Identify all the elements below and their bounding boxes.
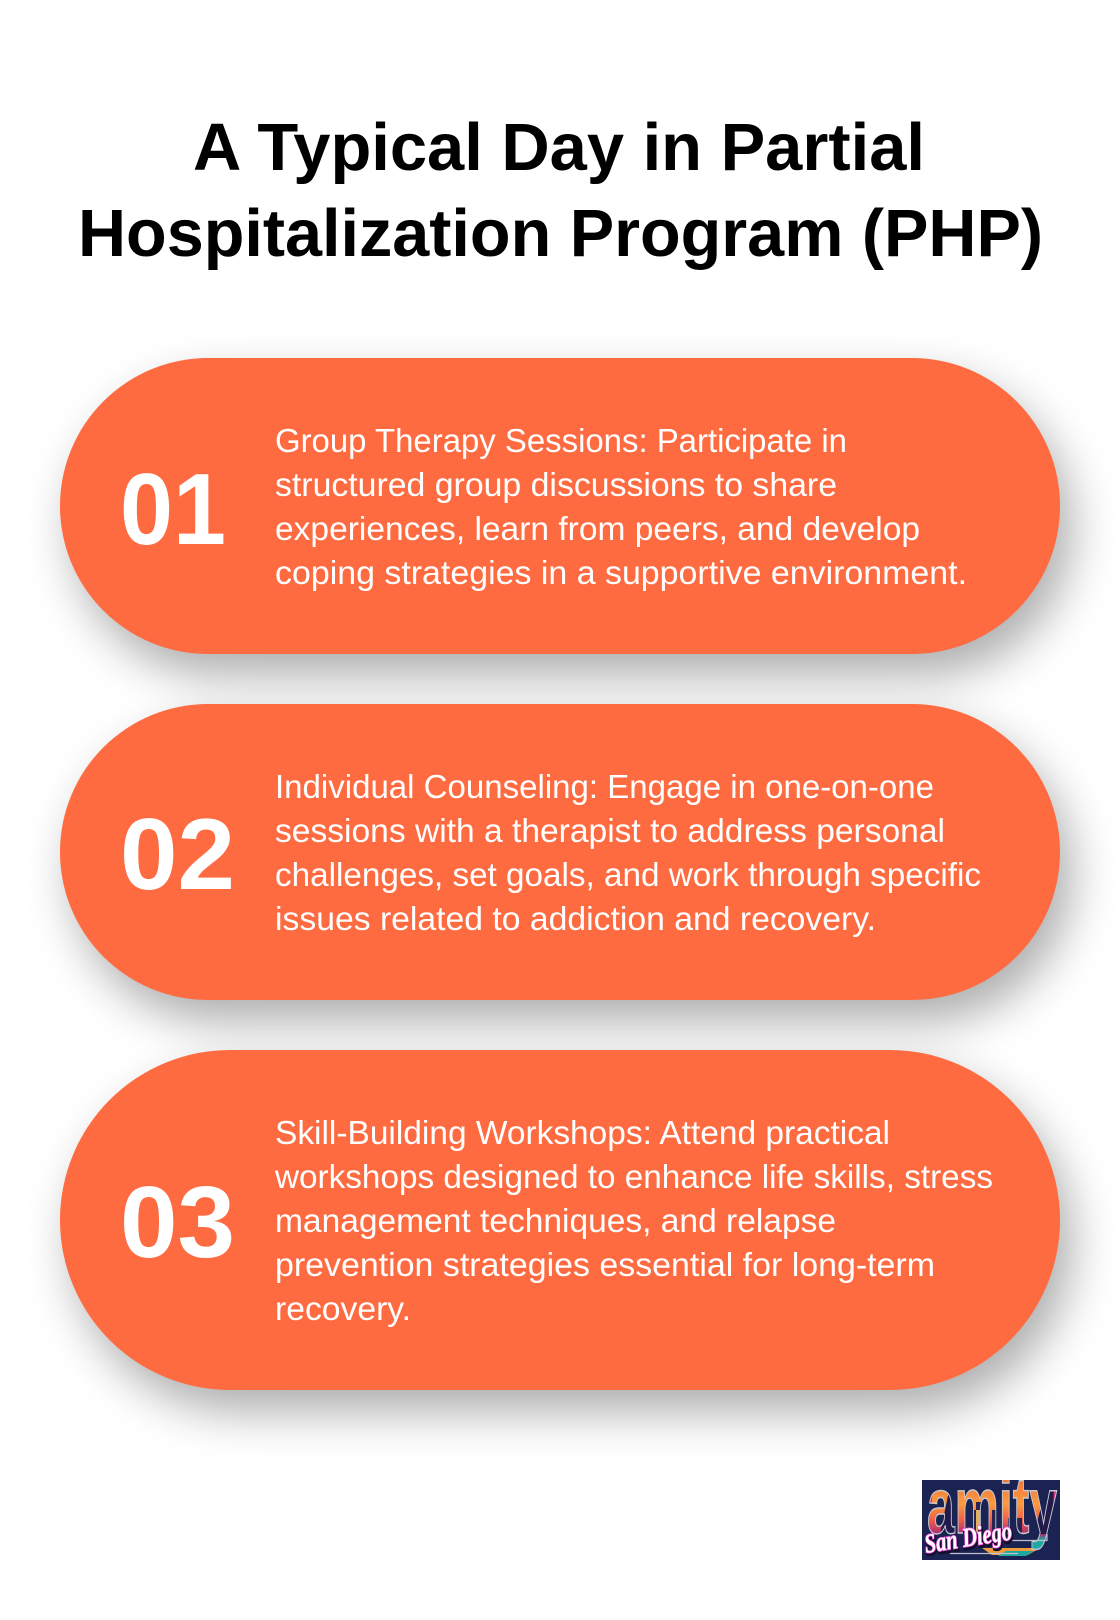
title: Hospitalization Program (PHP) <box>78 196 1043 271</box>
text: skill-building workshops: management techniques, and relapse <box>275 1202 836 1239</box>
number 03: 03 <box>120 1167 235 1279</box>
text: individual counseling: challenges, set goals, and work through specific <box>275 856 981 893</box>
text: individual counseling <box>275 768 981 937</box>
title: A Typical Day in Partial <box>193 110 925 185</box>
text: group therapy sessions: Group Therapy Sessions: Participate in <box>275 422 847 459</box>
number 02: 02 <box>120 799 235 911</box>
text: individual counseling: sessions with a therapist to address personal <box>275 812 945 849</box>
text: group therapy sessions <box>275 422 967 591</box>
text: group therapy sessions: experiences, learn from peers, and develop <box>275 510 920 547</box>
number 01: 01 <box>120 454 226 566</box>
text: individual counseling: Individual Counseling: Engage in one-on-one <box>275 768 934 805</box>
logo: Amity San Diego: San Diego <box>923 1518 1015 1560</box>
text: skill-building workshops: recovery. <box>275 1290 411 1327</box>
logo: Amity San Diego: San Diego <box>922 1516 1014 1559</box>
text: skill-building workshops <box>274 1114 993 1327</box>
text: skill-building workshops: prevention strategies essential for long-term <box>275 1246 935 1283</box>
panel: step 1 group therapy <box>60 358 1060 654</box>
panel: step 2 individual counseling <box>60 704 1060 1000</box>
text: individual counseling: issues related to addiction and recovery. <box>275 900 876 937</box>
panel: step 3 skill-building workshops <box>60 1050 1060 1390</box>
text: skill-building workshops: Skill-Building Workshops: Attend practical <box>275 1114 890 1151</box>
text: skill-building workshops: workshops designed to enhance life skills, stress <box>274 1158 993 1195</box>
text: group therapy sessions: coping strategies in a supportive environment. <box>275 554 967 591</box>
text: group therapy sessions: structured group discussions to share <box>275 466 837 503</box>
title <box>78 110 1043 271</box>
